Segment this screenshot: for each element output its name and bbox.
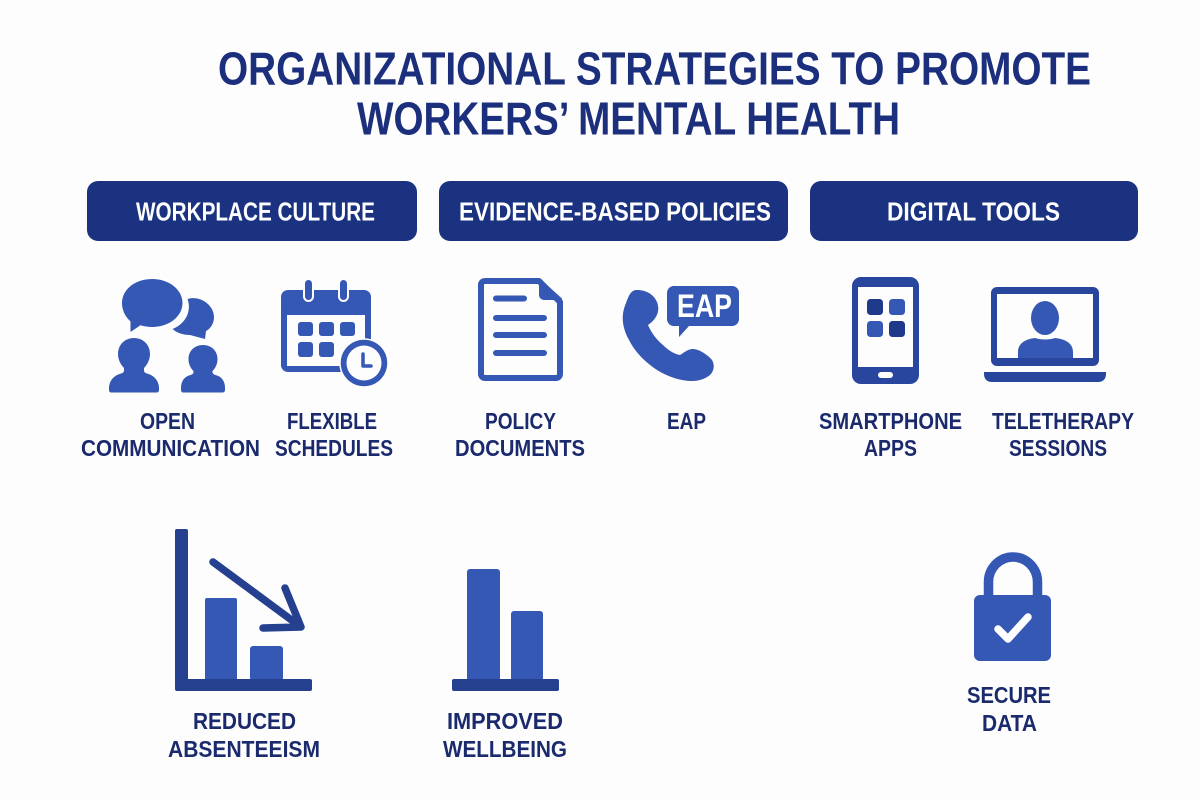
icon: flexible schedules calendar bbox=[281, 279, 388, 387]
label: secure data: SECURE bbox=[967, 682, 1051, 708]
label: open communication: OPEN bbox=[140, 408, 195, 434]
panel: workplace culture header: WORKPLACE CULTURE bbox=[136, 196, 375, 226]
icon: EAP phone with speech bubble: EAP bbox=[677, 288, 732, 324]
label: reduced absenteeism: ABSENTEEISM bbox=[168, 736, 320, 762]
label: smartphone apps bbox=[819, 408, 962, 461]
icon: secure data padlock bbox=[974, 557, 1051, 661]
label: policy documents: DOCUMENTS bbox=[455, 435, 585, 461]
icon: policy document bbox=[481, 280, 561, 378]
label: reduced absenteeism bbox=[168, 708, 320, 762]
label: flexible schedules: SCHEDULES bbox=[275, 435, 393, 461]
panel: evidence-based policies header: EVIDENCE-BASED POLICIES bbox=[459, 196, 771, 226]
label: flexible schedules bbox=[275, 408, 393, 461]
label: open communication: COMMUNICATION bbox=[81, 435, 260, 461]
label: teletherapy sessions bbox=[992, 408, 1134, 461]
label: reduced absenteeism: REDUCED bbox=[193, 708, 296, 734]
label: secure data bbox=[967, 682, 1051, 736]
label: improved wellbeing: WELLBEING bbox=[443, 736, 567, 762]
icon: reduced absenteeism chart bbox=[175, 529, 312, 691]
icon: EAP phone with speech bubble bbox=[623, 286, 739, 381]
panel: workplace culture header bbox=[87, 181, 417, 241]
label: smartphone apps: SMARTPHONE bbox=[819, 408, 962, 434]
label: smartphone apps: APPS bbox=[864, 435, 917, 461]
icon: smartphone apps bbox=[852, 277, 919, 384]
title bbox=[218, 42, 1091, 144]
label: improved wellbeing bbox=[443, 708, 567, 762]
label: improved wellbeing: IMPROVED bbox=[447, 708, 563, 734]
label: teletherapy sessions: TELETHERAPY bbox=[992, 408, 1134, 434]
title: WORKERS’ MENTAL HEALTH bbox=[357, 92, 900, 144]
label: teletherapy sessions: SESSIONS bbox=[1009, 435, 1107, 461]
panel: evidence-based policies header bbox=[439, 181, 788, 241]
label: secure data: DATA bbox=[982, 710, 1037, 736]
panel: digital tools header bbox=[810, 181, 1138, 241]
label: policy documents bbox=[455, 408, 585, 461]
icon: open communication bbox=[109, 279, 225, 392]
label: EAP: EAP bbox=[667, 408, 706, 434]
label: open communication bbox=[81, 408, 260, 461]
label: flexible schedules: FLEXIBLE bbox=[287, 408, 377, 434]
icon: improved wellbeing chart bbox=[452, 569, 559, 691]
panel: digital tools header: DIGITAL TOOLS bbox=[887, 196, 1060, 226]
label: policy documents: POLICY bbox=[485, 408, 556, 434]
icon: teletherapy laptop bbox=[984, 287, 1106, 382]
